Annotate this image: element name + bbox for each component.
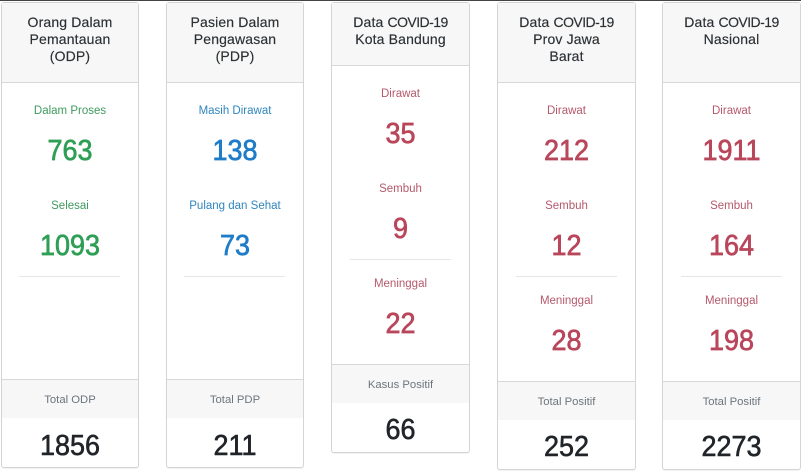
panel: Pasien Dalam Pengawasan (PDP) [166, 2, 304, 468]
number: 138: 138 [212, 135, 257, 167]
heading: PDP [167, 3, 303, 83]
footer: Total Positif [663, 381, 800, 420]
label: Selesai: Selesai [51, 200, 89, 212]
heading: Nasional [663, 3, 800, 83]
heading: ODP: Pemantauan [30, 31, 110, 47]
panel: Data COVID-19 Kota Bandung [331, 2, 470, 453]
label: Meninggal: Meninggal [705, 295, 758, 307]
panel: Data COVID-19 Nasional [662, 2, 801, 470]
footer: Total PDP [167, 379, 303, 418]
footer: Total Positif: Total Positif [703, 396, 760, 408]
number: 211: 211 [213, 430, 256, 462]
number: 73: 73 [220, 230, 250, 262]
number: 198: 198 [709, 325, 754, 357]
number: 1911: 1911 [702, 135, 761, 167]
number: 252: 252 [544, 431, 589, 463]
label: Pulang dan Sehat: Pulang dan Sehat [189, 200, 281, 212]
number: 2273: 2273 [701, 431, 761, 463]
heading: Kota Bandung: Kota Bandung [355, 31, 446, 47]
heading: Kota Bandung: Data COVID-19 [353, 14, 448, 30]
footer: Kasus Positif [332, 364, 469, 403]
heading: ODP: (ODP) [50, 48, 90, 64]
label: Masih Dirawat: Masih Dirawat [199, 105, 271, 117]
label: Sembuh: Sembuh [545, 200, 588, 212]
label: Sembuh: Sembuh [710, 200, 753, 212]
footer: Kasus Positif: Kasus Positif [368, 379, 433, 391]
heading: Nasional: Data COVID-19 [684, 14, 779, 30]
footer: Total ODP: Total ODP [44, 394, 96, 406]
footer: Total Positif: Total Positif [538, 396, 595, 408]
label: Dirawat: Dirawat [712, 105, 751, 117]
number: 9: 9 [393, 213, 408, 245]
heading: Prov Jawa Barat [498, 3, 635, 83]
number: 763: 763 [47, 135, 92, 167]
number: 1093: 1093 [40, 230, 100, 262]
number: 164: 164 [709, 230, 754, 262]
footer: Total ODP [2, 379, 138, 418]
heading: Prov Jawa Barat: Prov Jawa [533, 31, 600, 47]
heading: Prov Jawa Barat: Data COVID-19 [519, 14, 614, 30]
number: 22: 22 [385, 308, 415, 340]
panel: Data COVID-19 Prov Jawa Barat [497, 2, 636, 470]
footer: Total PDP: Total PDP [210, 394, 260, 406]
footer: Total Positif [498, 381, 635, 420]
heading: Kota Bandung [332, 3, 469, 66]
number: 212: 212 [544, 135, 589, 167]
heading: Prov Jawa Barat: Barat [549, 48, 584, 64]
number: 12: 12 [551, 230, 581, 262]
heading: PDP: Pasien Dalam [191, 14, 279, 30]
label: Sembuh: Sembuh [379, 183, 422, 195]
label: Dirawat: Dirawat [381, 88, 420, 100]
heading: Nasional: Nasional [704, 31, 759, 47]
label: Meninggal: Meninggal [540, 295, 593, 307]
number: 1856: 1856 [40, 430, 100, 462]
heading: PDP: Pengawasan [194, 31, 276, 47]
number: 66: 66 [385, 414, 415, 446]
top edge bar [0, 0, 801, 1]
heading: ODP [2, 3, 138, 83]
heading: ODP: Orang Dalam [28, 14, 112, 30]
number: 28: 28 [551, 325, 581, 357]
label: Dirawat: Dirawat [547, 105, 586, 117]
panel: Orang Dalam Pemantauan (ODP) [1, 2, 139, 468]
number: 35: 35 [385, 118, 415, 150]
label: Dalam Proses: Dalam Proses [34, 105, 106, 117]
heading: PDP: (PDP) [216, 48, 254, 64]
label: Meninggal: Meninggal [374, 278, 427, 290]
